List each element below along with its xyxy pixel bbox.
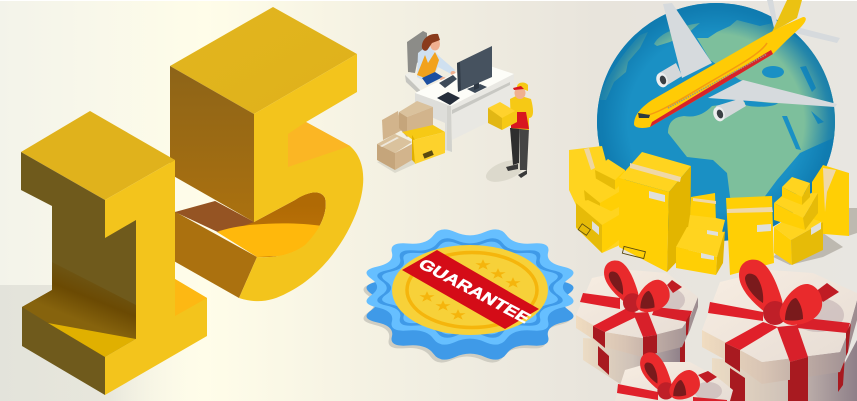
gift lid — [702, 300, 857, 384]
gift body — [583, 338, 682, 384]
woman at desk — [417, 34, 456, 85]
gift body — [712, 340, 857, 401]
lower stars — [419, 291, 466, 320]
monitor — [457, 46, 492, 93]
wide parcel — [726, 196, 774, 275]
airplane — [634, 0, 840, 128]
right parcel stack — [774, 165, 849, 265]
red banner — [402, 250, 539, 329]
numeral 5 — [170, 7, 363, 301]
rear wing — [663, 3, 712, 78]
window line — [668, 54, 767, 108]
desk — [415, 62, 514, 152]
1 dark side — [21, 152, 136, 395]
5 notch shadow — [288, 122, 350, 167]
badge shadow — [363, 245, 571, 363]
5 bowl light — [217, 223, 322, 257]
gold medal — [392, 245, 548, 335]
gift bottom — [615, 352, 733, 401]
left engine — [654, 63, 682, 89]
1 foot top — [48, 323, 136, 357]
cockpit window — [638, 113, 650, 118]
numeral 1 — [21, 111, 207, 395]
badge base — [366, 244, 574, 360]
gift bow — [739, 260, 822, 325]
globe — [597, 3, 840, 241]
tall parcel — [619, 152, 691, 272]
gift bow — [640, 352, 700, 400]
continent: North America — [598, 32, 648, 100]
orange cheatline — [638, 43, 767, 117]
floor under boxes — [377, 140, 450, 173]
delivery man — [483, 83, 533, 186]
badge top — [366, 229, 574, 345]
guarantee text: GUARANTEE — [414, 257, 534, 327]
parcel pile — [569, 146, 849, 275]
chair — [405, 31, 427, 95]
guarantee badge — [363, 229, 574, 363]
ground shadows — [773, 208, 857, 265]
centre parcel stack — [676, 193, 725, 275]
gift bow — [604, 260, 670, 312]
upper stars — [475, 259, 521, 288]
gift left — [576, 260, 698, 384]
1 front face — [105, 160, 207, 395]
1 foot shadow — [175, 279, 207, 316]
yellow box — [402, 125, 445, 140]
continent: Greenland — [654, 23, 700, 46]
left parcel stack — [569, 146, 625, 253]
tail fin — [772, 0, 802, 32]
keyboard — [439, 75, 457, 88]
gift right — [702, 260, 857, 401]
continent: Africa and Eurasia — [668, 20, 835, 198]
5 lower side face — [172, 210, 257, 298]
5 side face — [170, 66, 254, 222]
seas — [762, 66, 784, 78]
gift lid — [615, 362, 733, 401]
cardboard boxes — [377, 101, 445, 170]
tail stabilizer — [767, 0, 840, 43]
gift ribbon — [617, 384, 658, 400]
1 top face — [21, 111, 175, 200]
right engine — [711, 98, 746, 123]
red belly stripe — [650, 50, 773, 127]
office scene — [377, 31, 533, 186]
carried box — [488, 102, 517, 120]
5 top face — [170, 7, 357, 114]
5 bowl shadow — [215, 192, 326, 257]
gift ribbon — [708, 302, 763, 321]
1 side shadow — [22, 262, 136, 339]
badge ring — [377, 238, 563, 338]
5 front face — [239, 54, 363, 301]
front wing — [708, 80, 837, 107]
telephone — [437, 92, 460, 105]
fuselage — [634, 17, 806, 128]
gift ribbon — [580, 293, 620, 309]
gift lid — [576, 297, 698, 357]
